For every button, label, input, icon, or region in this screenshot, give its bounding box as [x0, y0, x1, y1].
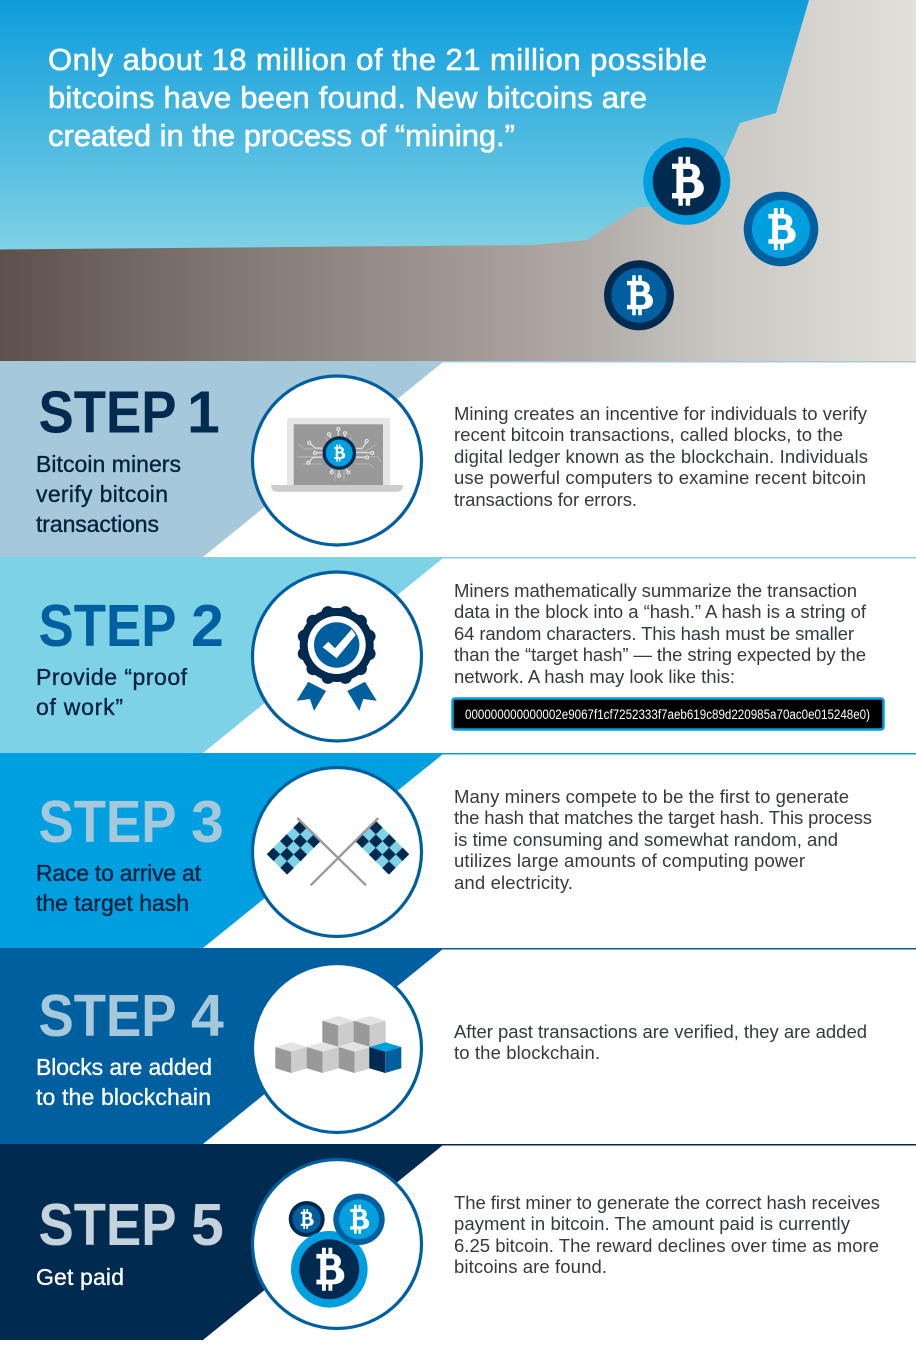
step 2 body text: data in the block into a “hash.” A hash is a string of [454, 601, 867, 622]
step 1 circle [252, 376, 422, 545]
step 1 body text: digital ledger known as the blockchain. Individuals [454, 446, 868, 467]
heading: bitcoins have been found. New bitcoins are [48, 80, 647, 115]
step 3 body text: and electricity. [454, 872, 573, 893]
icon: award badge with check [297, 606, 377, 711]
panel: hero [0, 0, 916, 362]
step 4 label: to the blockchain [36, 1084, 211, 1110]
step 2 body text: than the “target hash” — the string expected by the [454, 644, 866, 665]
step 1 label [36, 451, 181, 537]
step 2 colour wedge [0, 558, 443, 753]
step 1 label: Bitcoin miners [36, 451, 181, 477]
step 3 label [36, 860, 202, 916]
step 2 body text: 64 random characters. This hash must be smaller [454, 623, 854, 644]
icon: laptop with bitcoin [271, 418, 403, 492]
step 5 heading: 5 [191, 1192, 224, 1258]
step 4 colour wedge [0, 949, 443, 1144]
step 5 label: Get paid [36, 1264, 124, 1290]
step 3 body text: utilizes large amounts of computing power [454, 850, 805, 871]
panel: step 3 [0, 753, 916, 948]
step 2 label [36, 664, 188, 720]
panel: step 4 [0, 948, 916, 1144]
step 5 circle [252, 1160, 422, 1328]
step 3 colour wedge [0, 754, 443, 948]
step 2 body text: network. A hash may look like this: [454, 666, 735, 687]
step 5 colour wedge [0, 1145, 443, 1340]
step 1 colour wedge [0, 362, 443, 557]
step 5 heading: STEP [38, 1192, 176, 1258]
hash example box [452, 698, 884, 730]
step 1 label: verify bitcoin [36, 481, 168, 507]
step 1 body text [454, 403, 868, 510]
step 2 label: Provide “proof [36, 664, 188, 690]
step 1 heading: STEP [38, 380, 176, 446]
step 3 body text: Many miners compete to be the first to generate [454, 786, 849, 807]
step 2 circle [252, 572, 422, 741]
icon: bitcoin coin lower [604, 260, 674, 330]
step 4 heading: STEP [38, 983, 176, 1049]
step 5 body text: bitcoins are found. [454, 1256, 607, 1277]
step 2 body text [454, 580, 867, 687]
step 5 body text [454, 1192, 880, 1277]
step 5 body text: 6.25 bitcoin. The reward declines over time as more [454, 1235, 879, 1256]
step 4 body text: After past transactions are verified, they are added [454, 1021, 867, 1042]
panel: step 2 [0, 557, 916, 753]
step 2 heading: 2 [191, 593, 224, 659]
step 1 body text: Mining creates an incentive for individuals to verify [454, 403, 868, 424]
mountain [0, 0, 916, 362]
step 4 body text: to the blockchain. [454, 1042, 600, 1063]
step 3 label: the target hash [36, 890, 189, 916]
icon: bitcoin coin right [744, 192, 818, 266]
step 4 heading: 4 [191, 983, 224, 1049]
step 3 body text: is time consuming and somewhat random, and [454, 829, 838, 850]
step 3 label: Race to arrive at [36, 860, 202, 886]
step 2 heading: STEP [38, 593, 176, 659]
step 4 label [36, 1054, 212, 1110]
panel: step 1 [0, 361, 916, 557]
step 4 label: Blocks are added [36, 1054, 212, 1080]
step 3 heading: 3 [191, 789, 224, 855]
step 1 body text: use powerful computers to examine recent bitcoin [454, 467, 866, 488]
heading: created in the process of “mining.” [48, 118, 515, 153]
step 2 label: of work” [36, 694, 123, 720]
icon: stacked blocks [275, 1016, 401, 1073]
step 5 body text: payment in bitcoin. The amount paid is currently [454, 1213, 851, 1234]
icon: bitcoin coin large [643, 138, 730, 225]
step 2 body text: Miners mathematically summarize the transaction [454, 580, 857, 601]
icon: crossed checkered flags [267, 818, 409, 885]
step 1 label: transactions [36, 511, 159, 537]
step 5 body text: The first miner to generate the correct hash receives [454, 1192, 880, 1213]
step 3 body text [454, 786, 872, 893]
panel: step 5 [0, 1144, 916, 1340]
step 3 body text: the hash that matches the target hash. This process [454, 807, 872, 828]
sky background [0, 0, 916, 250]
step 1 body text: transactions for errors. [454, 489, 637, 510]
heading: Only about 18 million of the 21 million possible [48, 42, 707, 77]
step 3 circle [252, 768, 422, 936]
step 1 body text: recent bitcoin transactions, called blocks, to the [454, 424, 843, 445]
step 4 body text [454, 1021, 867, 1063]
heading [48, 42, 707, 153]
step 4 circle [252, 964, 422, 1132]
step 1 heading: 1 [187, 380, 220, 446]
step 3 heading: STEP [38, 789, 176, 855]
icon: pile of bitcoins [289, 1194, 385, 1308]
